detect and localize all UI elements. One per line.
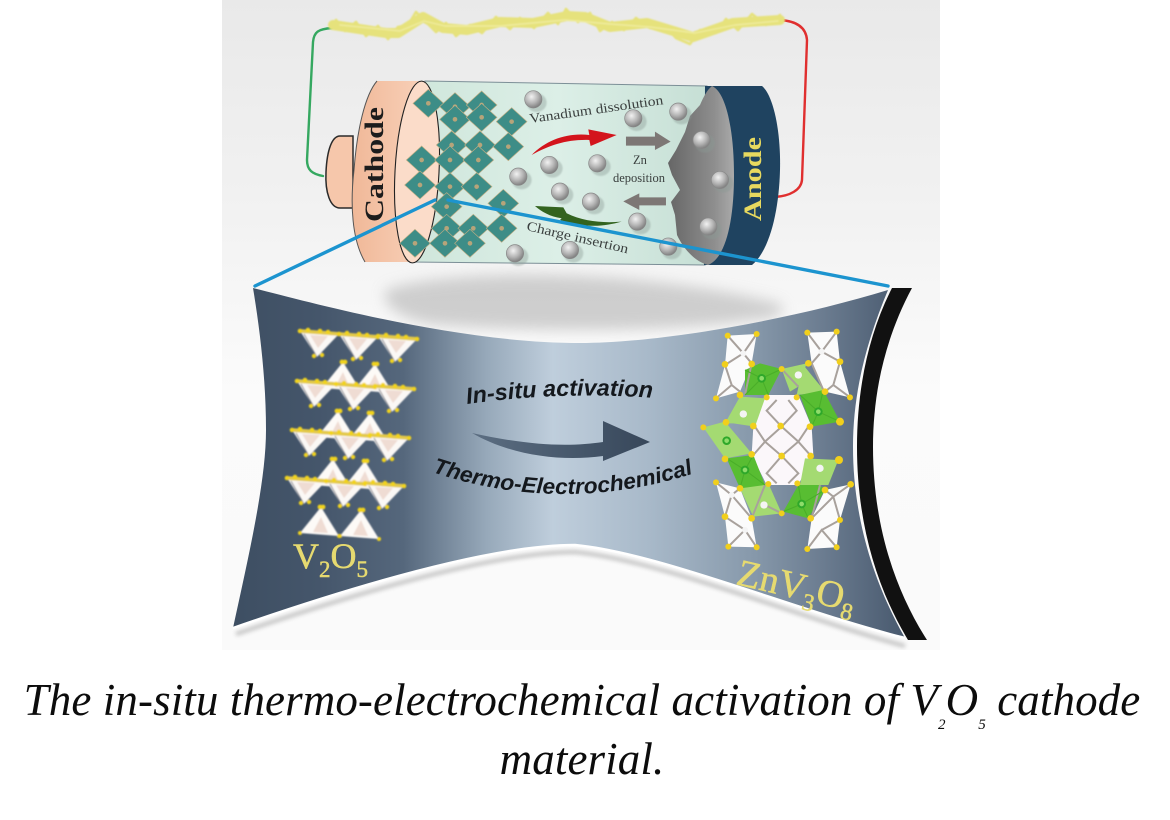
label: ZnV3O8: O xyxy=(812,571,849,618)
electrolyte body xyxy=(410,81,707,265)
label: Anode: Anode xyxy=(740,137,767,221)
red wire xyxy=(775,20,807,197)
label: V2O5: O xyxy=(330,536,356,576)
green zinc centres xyxy=(723,375,822,507)
label: ZnV3O8: 3 xyxy=(799,589,817,618)
grey right arrow xyxy=(626,132,671,150)
image background xyxy=(222,0,940,650)
label: ZnV3O8: ZnV xyxy=(733,552,810,609)
white vanadium polyhedra xyxy=(716,332,851,549)
cathode cap xyxy=(352,81,439,262)
label: Zn deposition: Zn xyxy=(633,153,648,167)
row 2 xyxy=(295,360,416,413)
process arrow xyxy=(472,421,650,461)
grey left arrow xyxy=(623,193,666,210)
label: V2O5: 5 xyxy=(356,557,368,582)
caption xyxy=(24,675,1140,784)
cathode inner ellipse xyxy=(390,80,444,264)
panel drop shadow xyxy=(236,552,905,646)
label: Zn deposition xyxy=(613,153,666,185)
battery shadow xyxy=(385,275,783,330)
label: Zn deposition: deposition xyxy=(613,171,666,185)
anode casing xyxy=(704,86,780,265)
cathode terminal xyxy=(326,136,353,208)
yellow lightning wire xyxy=(333,9,780,44)
caption: The in-situ thermo-electrochemical activation of V2O5 cathode xyxy=(24,675,1140,733)
label: Cathode: Cathode xyxy=(360,107,389,222)
crystal octahedra xyxy=(400,89,527,257)
anode face with deposited zinc xyxy=(668,86,734,265)
label: Vanadium dissolution: Vanadium dissolution xyxy=(528,92,664,126)
battery xyxy=(326,80,780,266)
blue zoom lines xyxy=(255,200,888,286)
dark green polyhedra xyxy=(727,363,840,518)
material panel xyxy=(233,288,927,640)
panel white highlight xyxy=(233,545,905,638)
zinc ions xyxy=(506,91,733,266)
caption: material. xyxy=(500,734,664,784)
row 4 xyxy=(285,457,406,510)
row 3 xyxy=(290,409,411,462)
red arrow xyxy=(532,129,617,155)
dark green arrow xyxy=(535,206,622,226)
row 5 xyxy=(298,505,381,541)
V2O5 layered structure xyxy=(285,328,419,541)
green polyhedra shading xyxy=(727,369,840,518)
curved panel xyxy=(233,288,905,638)
label: In-situ activation: In-situ activation xyxy=(467,378,652,404)
light green polyhedra xyxy=(703,363,838,517)
oxygen atoms xyxy=(700,329,854,552)
label: V2O5: 2 xyxy=(319,557,330,582)
reaction arrows xyxy=(532,129,671,226)
white atoms xyxy=(729,349,825,533)
cathode outline xyxy=(352,81,377,262)
external circuit xyxy=(307,9,807,197)
label: Charge insertion: Charge insertion xyxy=(525,218,630,256)
label: Thermo-Electrochemical: Thermo-Electrochemical xyxy=(436,458,691,494)
ZnV3O8 crystal structure xyxy=(700,329,854,552)
green wire xyxy=(307,28,332,176)
main figure xyxy=(222,0,940,650)
anode xyxy=(668,86,780,265)
row 1 xyxy=(298,328,419,363)
internal bonds xyxy=(716,332,851,549)
black curved edge xyxy=(857,288,927,640)
label: ZnV3O8: 8 xyxy=(838,599,855,627)
label: V2O5: V xyxy=(293,536,319,576)
